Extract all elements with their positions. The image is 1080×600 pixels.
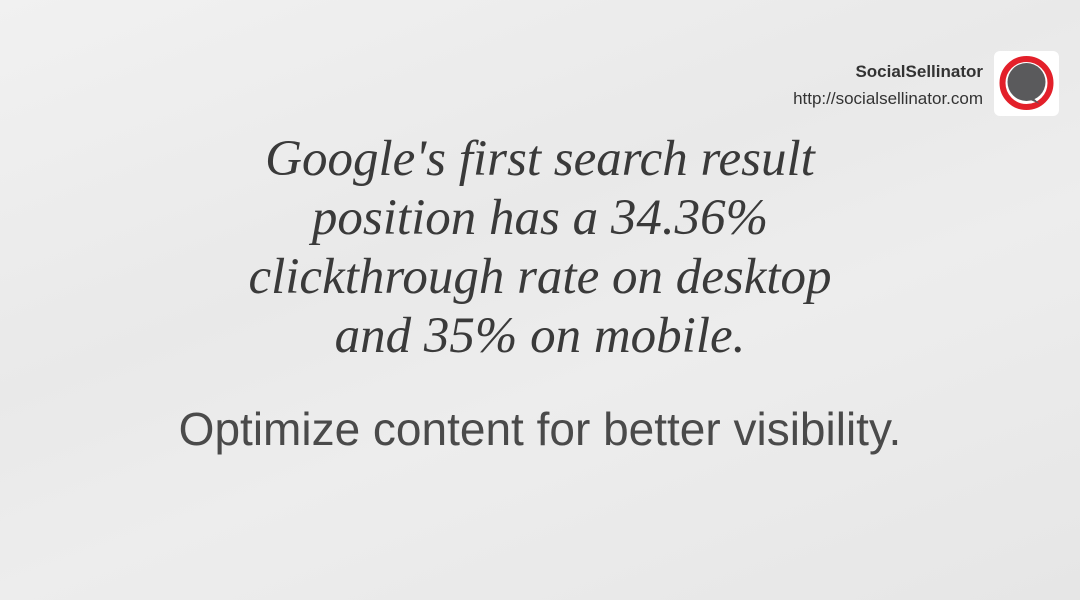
headline: clickthrough rate on desktop xyxy=(248,249,832,305)
headline: Google's first search result xyxy=(265,131,815,187)
headline xyxy=(248,131,832,364)
brand block xyxy=(793,51,1059,116)
icon: logo xyxy=(994,51,1059,116)
brand url: http://socialsellinator.com xyxy=(793,89,983,108)
headline: and 35% on mobile. xyxy=(335,308,745,364)
subtitle: Optimize content for better visibility. xyxy=(179,403,901,455)
headline: position has a 34.36% xyxy=(312,190,768,246)
brand name: SocialSellinator xyxy=(855,62,983,81)
